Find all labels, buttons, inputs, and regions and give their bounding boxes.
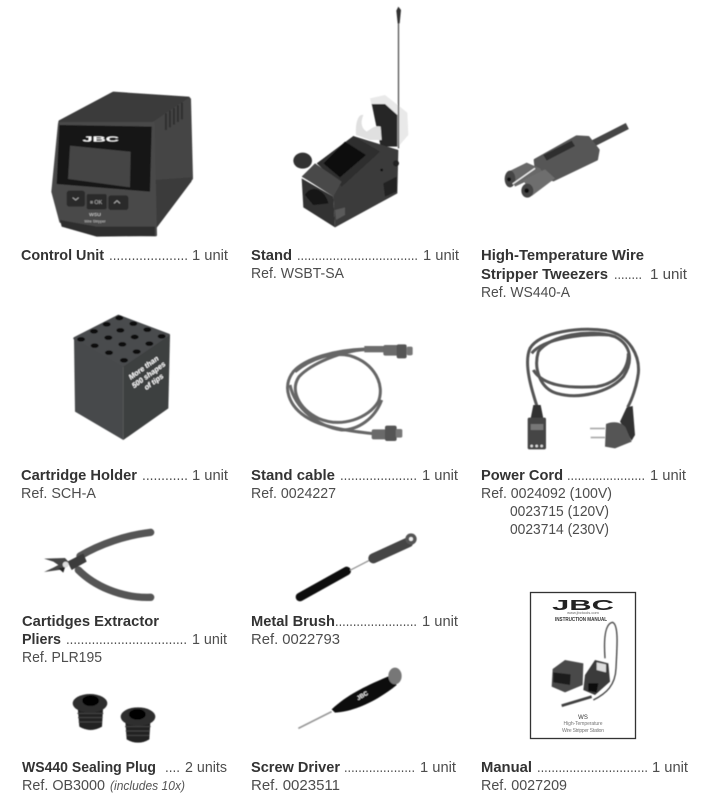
icon: screw driver: JBC [356,691,370,702]
text: metal brush: Metal Brush [251,613,335,630]
icon: cartridge holder: of tips [142,372,165,392]
text: pliers: Cartidges Extractor [22,613,159,630]
text: tweezers: High-Temperature Wire [481,247,644,264]
icon: pliers [44,532,151,597]
text: manual: ............................... [537,759,648,776]
icon: screw driver [298,668,402,728]
text: power cord: ...................... [567,467,645,484]
text: metal brush: Ref. 0022793 [251,631,340,648]
text: stand [251,247,460,282]
text: stand cable: Stand cable [251,467,335,484]
text: tweezers [481,247,688,301]
text: screw driver [251,759,457,794]
text: power cord: Power Cord [481,467,563,484]
icon: metal brush [300,533,417,597]
text: pliers: Ref. PLR195 [22,649,102,666]
text: manual: Ref. 0027209 [481,777,567,794]
icon: control unit: Wire Stripper [84,220,106,224]
text: stand: 1 unit [423,247,460,264]
text: tweezers: 1 unit [650,266,688,283]
text: sealing plug: 2 units [185,759,227,776]
icon: manual: High-Temperature [564,721,603,727]
text: control unit: 1 unit [192,247,229,264]
icon: sealing plugs [73,694,155,743]
text: manual [481,759,689,794]
icon: manual: JBC [552,597,614,614]
text: power cord: 0023714 (230V) [510,521,609,538]
text: stand: Stand [251,247,292,264]
icon: control unit [53,93,191,237]
icon: control unit: ≡ OK [90,200,103,206]
icon: power cord [528,329,639,449]
icon: manual [530,592,636,738]
text: screw driver: Ref. 0023511 [251,777,340,794]
icon: wire stripper tweezers [505,126,627,198]
icon: manual: INSTRUCTION MANUAL [555,617,607,623]
text: cartridge holder [21,467,229,502]
text: screw driver: Screw Driver [251,759,340,776]
icon: control unit: JBC [82,136,119,143]
text: control unit: ..................... [109,247,188,264]
icon: manual: WS [578,715,588,721]
icon: stand [293,7,408,227]
icon: cartridge holder [74,316,172,440]
icon: cartridge holder: 500 shapes [130,359,167,390]
text: screw driver: 1 unit [420,759,457,776]
text: stand cable: ..................... [340,467,417,484]
text: pliers: Pliers [22,631,61,648]
text: cartridge holder: Ref. SCH-A [21,485,96,502]
text: metal brush: 1 unit [422,613,459,630]
text: stand cable: Ref. 0024227 [251,485,336,502]
text: stand cable [251,467,459,502]
text: control unit: Control Unit [21,247,104,264]
text: sealing plug: (includes 10x) [110,778,185,793]
text: manual: 1 unit [652,759,689,776]
text: pliers: ................................. [66,631,187,648]
text: power cord [481,467,687,538]
text: control unit [21,247,229,264]
text: tweezers: ........ [614,266,642,283]
text: metal brush: ....................... [335,613,417,630]
text: cartridge holder: Cartridge Holder [21,467,137,484]
icon: manual: www.jbctools.com [567,610,600,615]
text: sealing plug [22,759,227,794]
text: metal brush [251,613,459,648]
text: cartridge holder: ............ [142,467,188,484]
text: power cord: 1 unit [650,467,687,484]
text: stand cable: 1 unit [422,467,459,484]
icon: control unit: WSU [89,212,101,218]
text: manual: Manual [481,759,532,776]
text: sealing plug: .... [165,759,180,776]
icon: stand cable [288,344,413,441]
text: tweezers: Ref. WS440-A [481,284,570,301]
text: tweezers: Stripper Tweezers [481,266,608,283]
text: power cord: Ref. 0024092 (100V) [481,485,612,502]
text: pliers [22,613,228,666]
text: pliers: 1 unit [192,631,228,648]
icon: manual: Wire Stripper Station [562,728,604,734]
text: stand: .................................. [297,247,418,264]
text: sealing plug: Ref. OB3000 [22,777,105,794]
text: screw driver: .................... [344,759,415,776]
text: power cord: 0023715 (120V) [510,503,609,520]
text: cartridge holder: 1 unit [192,467,229,484]
text: stand: Ref. WSBT-SA [251,265,344,282]
icon: cartridge holder: More than [127,353,161,382]
text: sealing plug: WS440 Sealing Plug [22,759,156,776]
